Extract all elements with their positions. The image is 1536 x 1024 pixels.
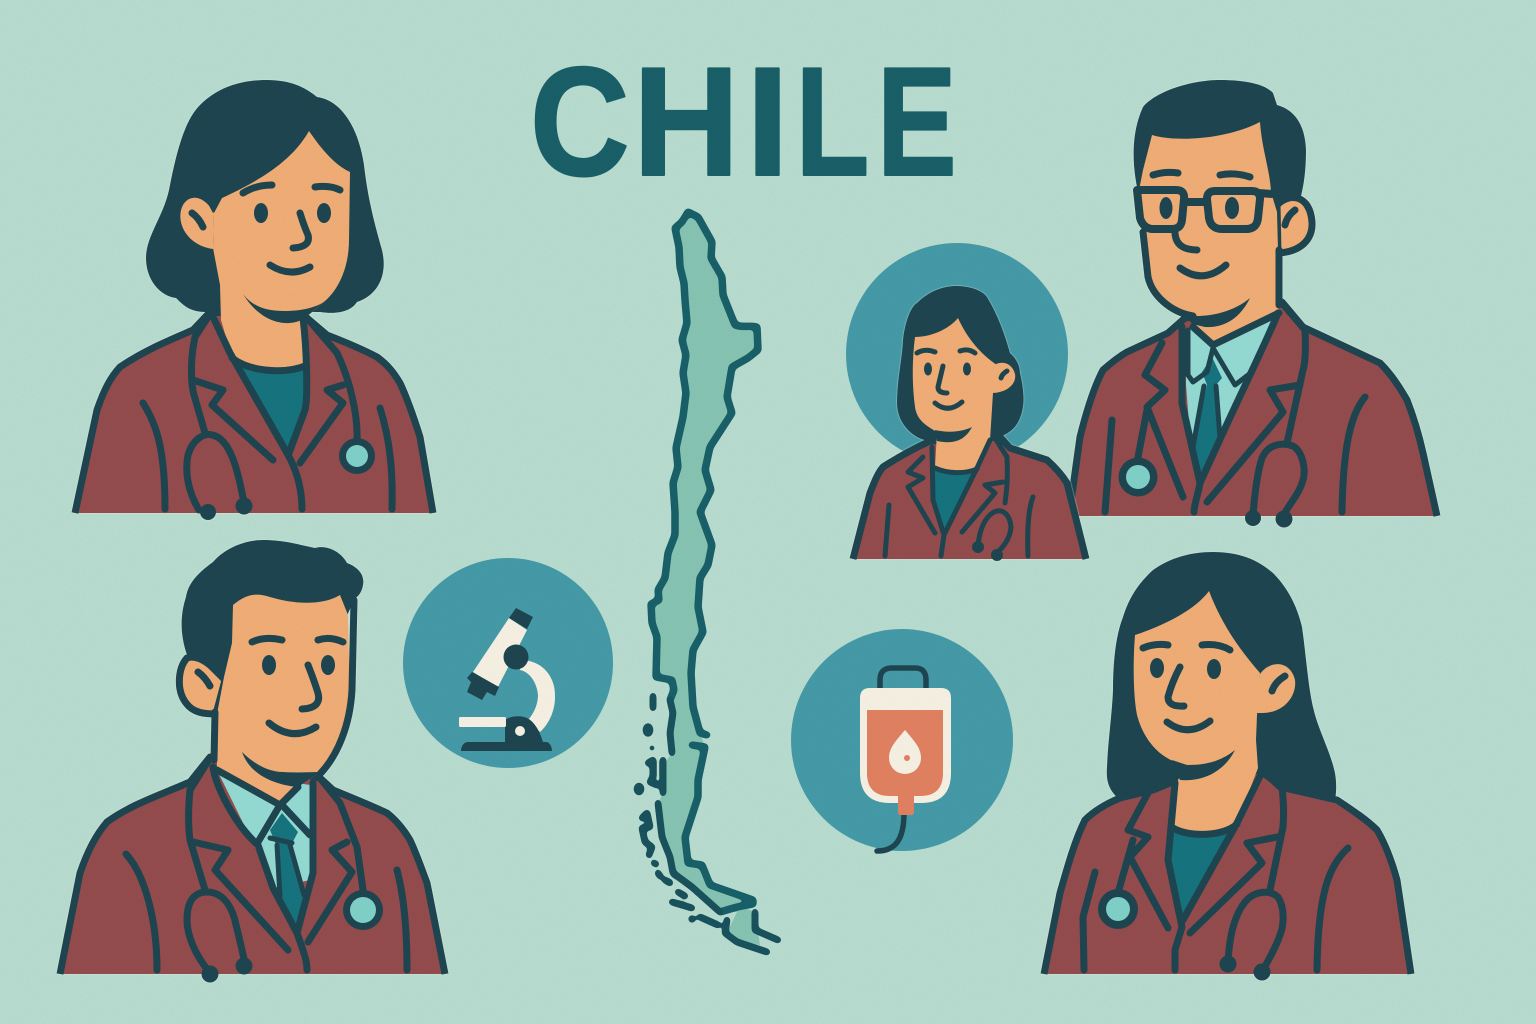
face and neck [913,318,997,472]
map of Chile [637,212,778,952]
hair notch by ear [206,196,222,213]
hair [1107,552,1336,800]
face and neck [1134,591,1260,834]
face and neck [1139,122,1279,344]
southern islands [637,696,778,952]
shirt [232,360,306,455]
icon: teal circle behind small portrait [846,243,1068,465]
chin shadow [1172,750,1235,780]
drop dot [904,755,910,761]
coastline [651,212,758,912]
facial features [1143,644,1285,730]
drop [889,730,921,774]
spout [898,795,914,815]
base [461,716,552,751]
facial features [917,350,1007,408]
eyepiece [509,608,533,629]
facial features [192,185,340,272]
tube [473,618,527,687]
mainland fill [651,212,760,945]
circle background [403,558,613,768]
coat lines [885,438,1033,556]
arm [520,660,555,732]
chin shadow [243,294,325,323]
hanger [880,668,926,689]
portrait: small woman doctor in circle [853,286,1086,561]
ear [1255,664,1295,713]
icon: blood bag [791,629,1013,851]
focus knob [504,644,528,670]
icon: microscope [403,558,613,768]
shirt [1170,828,1232,922]
blood [867,710,943,796]
chin shadow [1185,298,1250,327]
ear [1277,198,1312,253]
title: CHILE [530,35,957,209]
ear [179,657,225,714]
stethoscope parts [202,890,383,982]
stage [459,717,506,727]
circle background [791,629,1013,851]
lab coat [1069,302,1437,516]
ear [180,198,214,249]
lab coat [75,312,433,513]
stethoscope ends [972,541,1003,561]
title: CHILE: I [746,35,789,208]
title: CHILE: L [796,36,869,208]
lab coat [853,437,1086,559]
portrait: long-haired woman doctor, bottom right [1044,552,1411,980]
portrait: woman doctor, top left [75,80,433,520]
facial features [198,638,343,734]
chin shadow [242,752,320,787]
lab coat [60,757,445,974]
stethoscope parts [1118,458,1292,528]
shirt and collar [217,770,310,888]
tie [270,813,303,932]
coat lines [1105,232,1365,515]
coat lines [1083,772,1348,972]
bag [860,688,951,803]
objective lens [467,672,499,700]
portrait: man with glasses, top right [1069,80,1437,528]
base hole [515,726,525,736]
chin shadow [935,427,972,442]
face and neck [217,595,350,803]
shirt [935,470,977,532]
hair [1134,80,1306,212]
tie [1193,357,1222,480]
facial features [1153,172,1295,276]
hair [182,540,363,690]
tube [877,813,904,851]
title: CHILE: E [877,36,957,209]
portrait: man doctor, bottom left [60,540,445,982]
coat lines [126,600,407,973]
stethoscope parts [1098,889,1270,980]
coat lines and stethoscope [143,314,392,510]
face and neck [213,131,350,369]
hair [146,80,384,313]
stethoscope parts [200,438,375,520]
title: CHILE: C [530,36,630,209]
lab coat [1044,770,1411,974]
glasses [1137,190,1272,229]
hair [897,286,1024,441]
shirt and collar [1186,313,1278,435]
title: CHILE: H [633,36,739,209]
ear [992,363,1015,393]
